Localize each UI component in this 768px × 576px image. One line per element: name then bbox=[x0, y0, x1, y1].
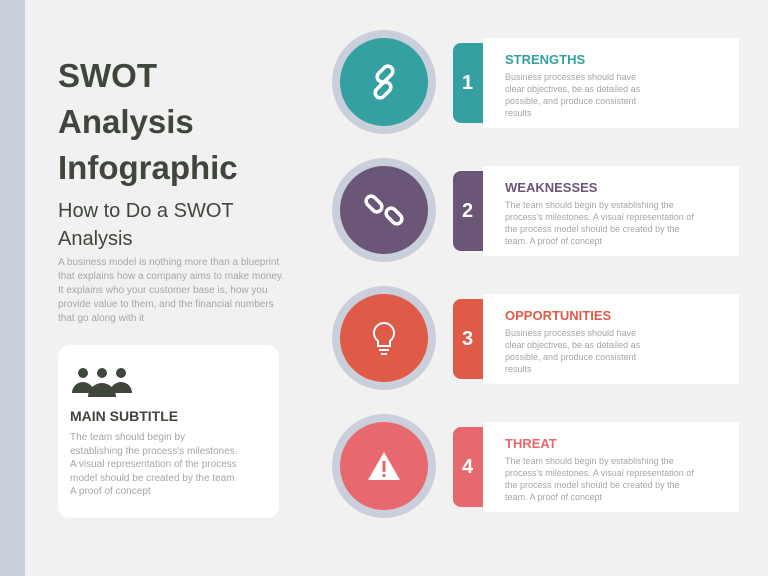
icon: link circle bbox=[332, 30, 436, 134]
card text: Business processes should have bbox=[505, 72, 636, 82]
card text: team. A proof of concept bbox=[505, 492, 602, 502]
card text bbox=[483, 38, 739, 128]
card text: The team should begin by establishing the bbox=[505, 456, 674, 466]
row: opportunities bbox=[332, 286, 739, 390]
text: The team should begin by bbox=[70, 432, 185, 443]
intro text: that explains how a company aims to make money. bbox=[58, 271, 284, 282]
card text bbox=[483, 422, 739, 512]
card text: STRENGTHS bbox=[505, 52, 585, 67]
intro text: It explains who your customer base is, how you bbox=[58, 285, 268, 296]
number tab 4: 4 bbox=[462, 456, 473, 478]
text: A visual representation of the process bbox=[70, 459, 237, 470]
card text: results bbox=[505, 108, 532, 118]
card text: WEAKNESSES bbox=[505, 180, 597, 195]
card text bbox=[483, 166, 739, 256]
intro text: that go along with it bbox=[58, 313, 144, 324]
number tab 2: 2 bbox=[462, 200, 473, 222]
icon: bulb bbox=[332, 286, 436, 390]
card text: Business processes should have bbox=[505, 328, 636, 338]
card text: process's milestones. A visual representation of bbox=[505, 468, 694, 478]
number tab 1 bbox=[453, 43, 487, 123]
panel: main subtitle card bbox=[58, 345, 279, 518]
number tab 3 bbox=[453, 299, 487, 379]
intro text bbox=[58, 257, 284, 324]
title: Analysis bbox=[58, 103, 194, 140]
card text: the process model should be created by the bbox=[505, 224, 680, 234]
icon: people bbox=[72, 368, 132, 397]
text bbox=[70, 432, 238, 497]
icon: warning bbox=[332, 414, 436, 518]
card text bbox=[483, 294, 739, 384]
subtitle bbox=[58, 200, 234, 250]
row: strengths bbox=[332, 30, 739, 134]
card text: OPPORTUNITIES bbox=[505, 308, 611, 323]
number tab 2 bbox=[453, 171, 487, 251]
card text: results bbox=[505, 364, 532, 374]
card text: the process model should be created by the bbox=[505, 480, 680, 490]
number tab 3: 3 bbox=[462, 328, 473, 350]
row: threat bbox=[332, 414, 739, 518]
intro text: A business model is nothing more than a blueprint bbox=[58, 257, 279, 268]
subtitle: Analysis bbox=[58, 228, 132, 250]
intro text: provide value to them, and the financial numbers bbox=[58, 299, 274, 310]
title: SWOT bbox=[58, 57, 157, 94]
subtitle: How to Do a SWOT bbox=[58, 200, 234, 222]
number tab 1: 1 bbox=[462, 72, 473, 94]
card text: process's milestones. A visual representation of bbox=[505, 212, 694, 222]
card text: team. A proof of concept bbox=[505, 236, 602, 246]
row: weaknesses bbox=[332, 158, 739, 262]
icon: broken link bbox=[332, 158, 436, 262]
number tab 4 bbox=[453, 427, 487, 507]
text: A proof of concept bbox=[70, 486, 151, 497]
card text: clear objectives, be as detailed as bbox=[505, 340, 640, 350]
card text: THREAT bbox=[505, 436, 557, 451]
heading: MAIN SUBTITLE bbox=[70, 408, 178, 424]
title: Infographic bbox=[58, 149, 238, 186]
card text: clear objectives, be as detailed as bbox=[505, 84, 640, 94]
title bbox=[58, 57, 238, 186]
card text: The team should begin by establishing the bbox=[505, 200, 674, 210]
left stripe bbox=[0, 0, 25, 576]
card text: possible, and produce consistent bbox=[505, 352, 636, 362]
text: establishing the process's milestones. bbox=[70, 446, 238, 456]
card text: possible, and produce consistent bbox=[505, 96, 636, 106]
text: model should be created by the team bbox=[70, 472, 235, 484]
